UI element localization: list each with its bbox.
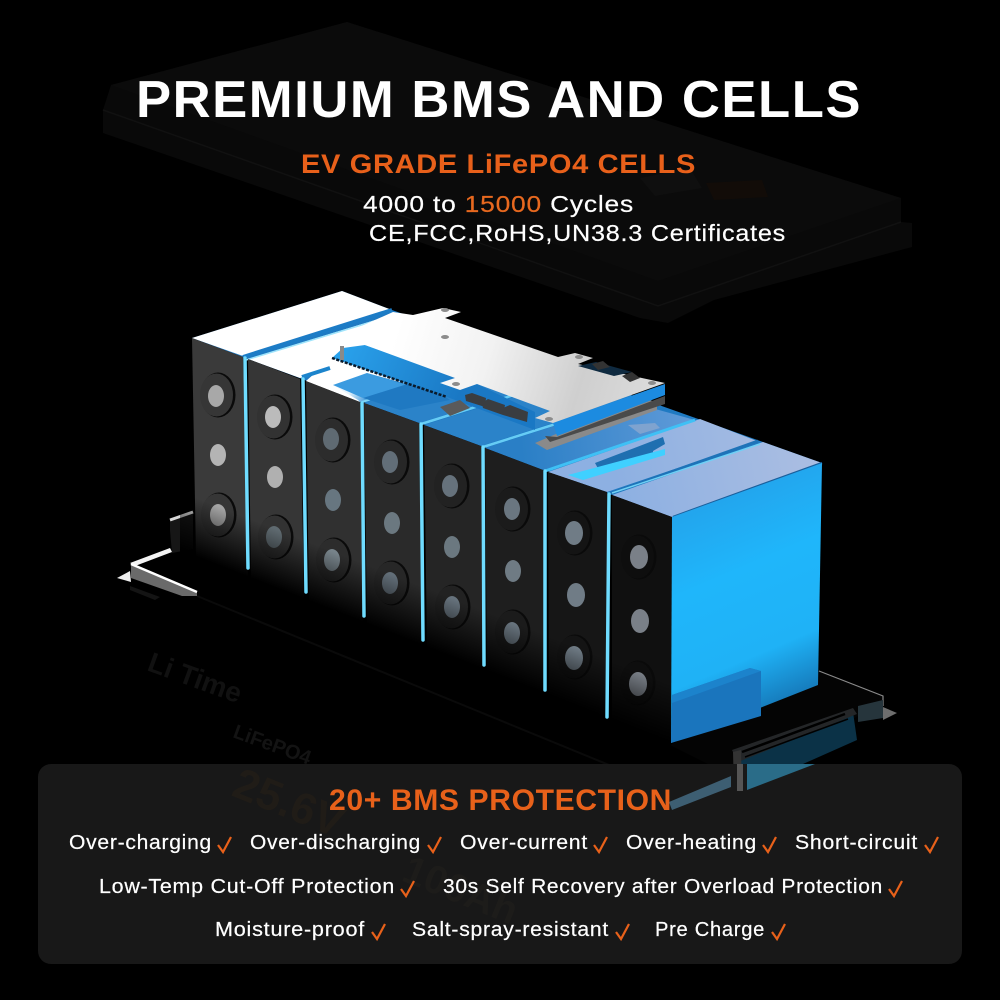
- row 2 of protections: Low-Temp Cut-Off Protection: [99, 876, 395, 898]
- aluminium plate: [330, 308, 665, 423]
- cell top faces: [192, 291, 822, 517]
- cycles line: 4000 to 15000 Cycles: [363, 191, 634, 217]
- battery cells: [180, 291, 822, 750]
- row 3 of protections: Salt-spray-resistant: [412, 919, 609, 941]
- row 3 of protections: Pre Charge: [655, 919, 765, 941]
- row 1 of protections: [69, 832, 918, 854]
- BMS board: [330, 308, 665, 450]
- row 3 of protections: [215, 919, 765, 941]
- row 1 of protections: Over-charging: [69, 832, 212, 854]
- row 2 of protections: [99, 876, 883, 898]
- base tray left corner: [117, 512, 670, 790]
- cell terminals: contacts: [208, 385, 649, 696]
- row 1 of protections: Over-discharging: [250, 832, 421, 854]
- bottom fade over cell fronts: [180, 330, 671, 750]
- cell front faces: [192, 338, 672, 743]
- glowing gaps between cells: [245, 358, 609, 717]
- row 1 of protections: Over-current: [460, 832, 588, 854]
- certificates line: CE,FCC,RoHS,UN38.3 Certificates: [369, 220, 786, 246]
- panel heading: 20+ BMS PROTECTION: [329, 784, 672, 817]
- row 2 of protections: 30s Self Recovery after Overload Protection: [443, 876, 883, 898]
- base tray right corner and connector: [670, 671, 897, 792]
- row 1 of protections: Short-circuit: [795, 832, 918, 854]
- row 3 of protections: Moisture-proof: [215, 919, 365, 941]
- faded lower battery label: Li Time: [144, 647, 246, 709]
- row 2 check marks: [401, 881, 902, 896]
- panel: BMS protection: [38, 647, 962, 964]
- connector showing through panel: [669, 764, 815, 810]
- MOSFET chips: [465, 393, 528, 422]
- cell top dividers: [243, 310, 822, 517]
- row 1 of protections: Over-heating: [626, 832, 757, 854]
- cell 8 side face: [671, 463, 822, 743]
- subtitle: cells: EV GRADE LiFePO4 CELLS: [301, 149, 696, 179]
- faded lower battery label: [144, 647, 315, 770]
- row 1 check marks: [218, 837, 938, 852]
- faded battery voltage print: 25.6V: [226, 759, 352, 848]
- title: PREMIUM BMS AND CELLS: [136, 71, 862, 129]
- panel background: [38, 764, 962, 964]
- blue patch under board: [333, 373, 450, 410]
- row 3 check marks: [372, 924, 785, 939]
- faded battery voltage print: 100Ah: [397, 848, 524, 933]
- faded battery voltage print: [226, 759, 524, 933]
- cell 7 busbar: [568, 423, 665, 480]
- cell terminals: rings: [200, 372, 656, 706]
- battery case lid: [103, 22, 912, 323]
- faded lower battery label: LiFePO4: [230, 721, 315, 770]
